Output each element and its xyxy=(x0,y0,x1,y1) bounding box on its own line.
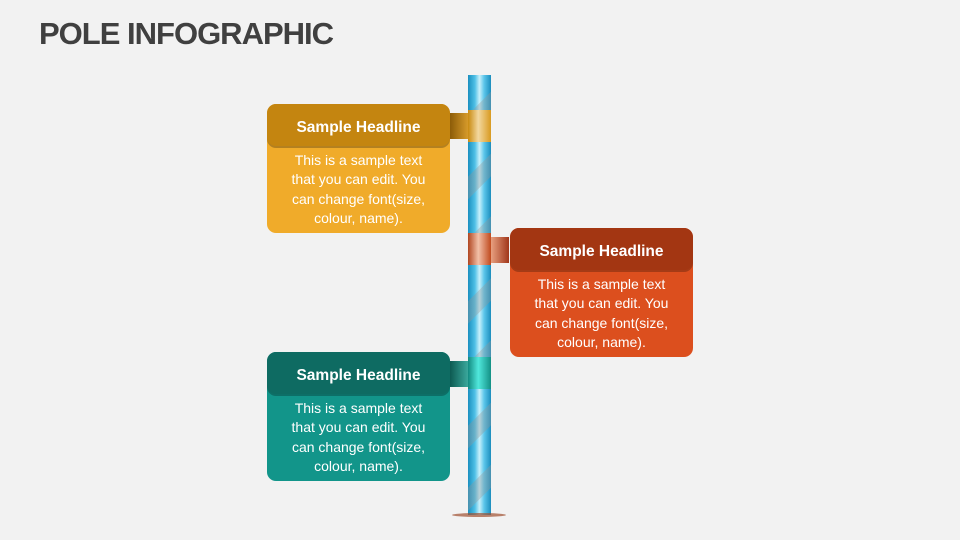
text block: can change font(size, xyxy=(292,439,425,455)
panel: orange card xyxy=(510,228,693,357)
pole base xyxy=(452,513,506,517)
heading: Sample Headline xyxy=(296,119,421,136)
text block: This is a sample text xyxy=(538,276,665,292)
heading xyxy=(510,228,693,270)
band: yellow xyxy=(468,110,491,142)
text block: can change font(size, xyxy=(535,315,668,331)
panel: teal card xyxy=(267,352,450,481)
heading xyxy=(267,352,450,394)
text block xyxy=(292,152,425,226)
heading: Sample Headline xyxy=(539,243,664,260)
panel: yellow card xyxy=(267,104,450,233)
text block: that you can edit. You xyxy=(292,171,425,187)
pole xyxy=(468,75,491,515)
text block: This is a sample text xyxy=(295,152,422,168)
connector: teal xyxy=(450,361,468,387)
text block: can change font(size, xyxy=(292,191,425,207)
heading: Sample Headline xyxy=(296,367,421,384)
connector: orange xyxy=(491,237,509,263)
text block: colour, name). xyxy=(314,210,403,226)
heading xyxy=(267,104,450,146)
text block: that you can edit. You xyxy=(535,295,668,311)
text block: colour, name). xyxy=(557,334,646,350)
connector: yellow xyxy=(450,113,468,139)
text block: colour, name). xyxy=(314,458,403,474)
band: teal xyxy=(468,357,491,389)
text block xyxy=(292,400,425,474)
title: POLE INFOGRAPHIC xyxy=(39,16,333,51)
text block: that you can edit. You xyxy=(292,419,425,435)
band: orange xyxy=(468,233,491,265)
text block: This is a sample text xyxy=(295,400,422,416)
text block xyxy=(534,276,668,350)
